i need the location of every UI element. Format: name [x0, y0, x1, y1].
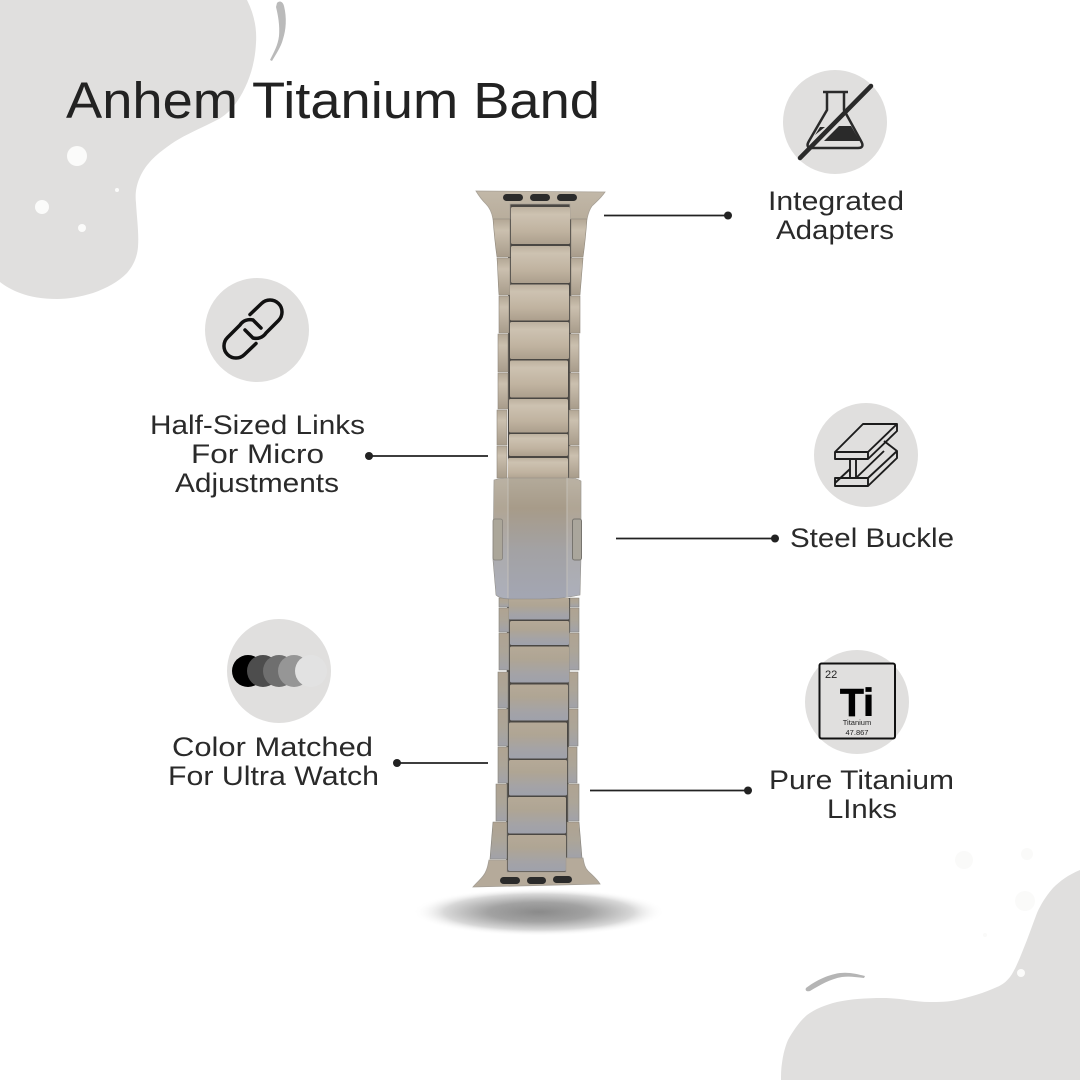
lower side links [490, 598, 582, 859]
icon: crossed-out flask [783, 70, 887, 174]
watch band [473, 191, 605, 887]
icon: steel beam [814, 403, 918, 507]
label: color matched: For Ultra Watch [168, 761, 379, 791]
label: half-sized links [150, 410, 365, 498]
bottom adapter lugs [500, 876, 572, 884]
band dark backing [506, 204, 572, 875]
leader line: integrated adapters [604, 212, 732, 220]
label: steel buckle: Steel Buckle [790, 523, 954, 553]
icon: titanium element tile [805, 650, 909, 754]
icon: titanium element tile: 47.867 [846, 728, 868, 737]
label: pure titanium links [769, 765, 954, 824]
label: pure titanium links: LInks [827, 794, 897, 824]
icon: titanium element tile: 22 [825, 669, 837, 681]
clasp [493, 478, 582, 599]
upper centre links [508, 207, 570, 480]
leader line: steel buckle [616, 534, 779, 542]
label: integrated adapters: Adapters [776, 215, 894, 245]
decorative dots: bottom right [955, 848, 1035, 977]
label: pure titanium links: Pure Titanium [769, 765, 954, 795]
icon: chain link [205, 278, 309, 382]
leader line: color matched [393, 759, 488, 767]
background blob: bottom right [781, 870, 1080, 1080]
bottom adapter [473, 858, 600, 887]
label: half-sized links: For Micro [191, 439, 324, 469]
label: half-sized links: Half-Sized Links [150, 410, 365, 440]
title: Anhem Titanium Band [66, 72, 600, 129]
lower centre links [508, 598, 569, 871]
label: integrated adapters [768, 186, 904, 245]
leader line: half-sized links [365, 452, 488, 460]
label: integrated adapters: Integrated [768, 186, 904, 216]
label: half-sized links: Adjustments [175, 468, 339, 498]
icon: color swatches [227, 619, 331, 723]
background blob: top left [0, 0, 256, 299]
upper side links [493, 219, 587, 478]
leader line: pure titanium [590, 786, 752, 794]
icon: titanium element tile: Titanium [843, 718, 871, 727]
label: color matched: Color Matched [172, 732, 373, 762]
decorative swoosh: top [270, 2, 286, 61]
icon: titanium element tile: Ti [840, 682, 874, 725]
decorative dots: top left [35, 146, 119, 232]
decorative swoosh: bottom [806, 973, 865, 991]
top adapter lugs [503, 194, 577, 201]
watch band shadow [413, 888, 665, 936]
label: color matched [168, 732, 379, 791]
top adapter [476, 191, 605, 219]
